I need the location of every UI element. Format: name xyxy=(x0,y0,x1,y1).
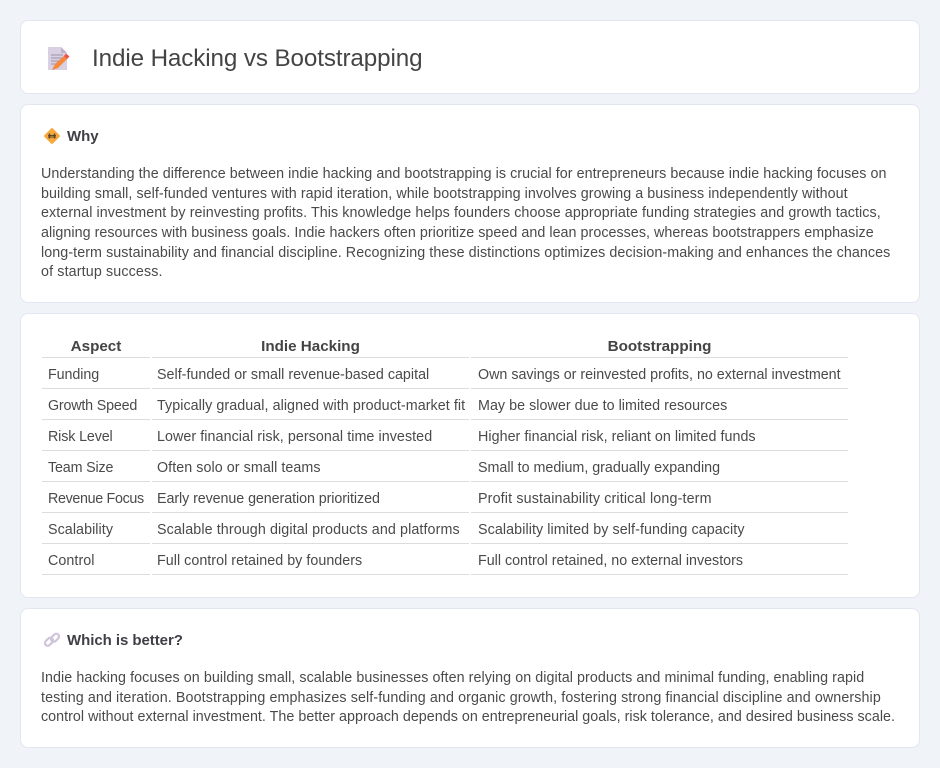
panel: header xyxy=(20,20,920,94)
row: revenue focus: Early revenue generation prioritized xyxy=(157,491,380,507)
row: control xyxy=(42,553,848,575)
text block: why: long-term sustainability and financial discipline. Recognizing these distinctions optimizes decision-making and enhances the chances xyxy=(41,245,890,261)
row: scalability xyxy=(42,522,848,544)
text block: which is better: Indie hacking focuses on building small, scalable businesses often relying on digital products and minimal funding, enabling rapid xyxy=(41,670,864,686)
row: team size: Team Size xyxy=(48,460,113,476)
row: risk level: Higher financial risk, reliant on limited funds xyxy=(478,429,756,445)
title: Indie Hacking vs Bootstrapping xyxy=(92,45,422,72)
row: control: Full control retained by founders xyxy=(157,553,362,569)
row: control: Control xyxy=(48,553,95,569)
row: team size xyxy=(42,460,848,482)
panel: why xyxy=(20,104,920,303)
text block: which is better: testing and iteration. Bootstrapping emphasizes self-funding and organic growth, fostering strong financial discipline and ownership xyxy=(41,690,881,706)
text block: why: of startup success. xyxy=(41,264,163,280)
text block: which is better: control without external investment. The better approach depends on entrepreneurial goals, risk tolerance, and desired business scale. xyxy=(41,709,895,725)
row: growth speed: Typically gradual, aligned with product-market fit xyxy=(157,398,465,414)
row: control: Full control retained, no external investors xyxy=(478,553,743,569)
icon: chain link xyxy=(44,632,60,647)
heading: which is better: Which is better? xyxy=(67,632,183,649)
table header row: Bootstrapping xyxy=(608,338,711,355)
row: revenue focus: Profit sustainability critical long-term xyxy=(478,491,712,507)
text block: why xyxy=(41,166,890,280)
row: scalability: Scalable through digital products and platforms xyxy=(157,522,460,538)
row: revenue focus xyxy=(42,491,848,513)
text block: which is better xyxy=(41,670,895,725)
row: scalability: Scalability xyxy=(48,522,113,538)
heading: why: Why xyxy=(67,128,99,145)
row: growth speed xyxy=(42,398,848,420)
row: funding xyxy=(42,367,848,389)
row: funding: Own savings or reinvested profits, no external investment xyxy=(478,367,841,383)
text block: why: building small, self-funded ventures with rapid iteration, while bootstrapping involves growing a business independently without xyxy=(41,186,848,202)
panel: which is better xyxy=(20,608,920,748)
row: risk level xyxy=(42,429,848,451)
text block: why: Understanding the difference between indie hacking and bootstrapping is crucial for entrepreneurs because indie hacking focuses on xyxy=(41,166,887,182)
row: funding: Self-funded or small revenue-based capital xyxy=(157,367,429,383)
row: team size: Small to medium, gradually expanding xyxy=(478,460,720,476)
text block: why: external investment by reinvesting profits. This knowledge helps founders choose appropriate funding strategies and growth tactics, xyxy=(41,205,881,221)
table header row: Aspect xyxy=(71,338,121,355)
row: scalability: Scalability limited by self-funding capacity xyxy=(478,522,745,538)
table header row: Indie Hacking xyxy=(261,338,360,355)
row: growth speed: May be slower due to limited resources xyxy=(478,398,727,414)
icon: road sign diamond xyxy=(44,128,60,144)
row: risk level: Lower financial risk, personal time invested xyxy=(157,429,432,445)
row: team size: Often solo or small teams xyxy=(157,460,321,476)
row: growth speed: Growth Speed xyxy=(48,398,137,414)
row: risk level: Risk Level xyxy=(48,429,113,445)
row: revenue focus: Revenue Focus xyxy=(48,491,144,507)
table header row xyxy=(42,338,848,358)
comparison table xyxy=(42,338,848,575)
row: funding: Funding xyxy=(48,367,99,383)
icon: document with pencil xyxy=(48,47,70,70)
text block: why: aligning resources with business goals. Indie hackers often prioritize speed and lean processes, whereas bootstrappers emphasize xyxy=(41,225,874,241)
panel: comparison table xyxy=(20,313,920,598)
